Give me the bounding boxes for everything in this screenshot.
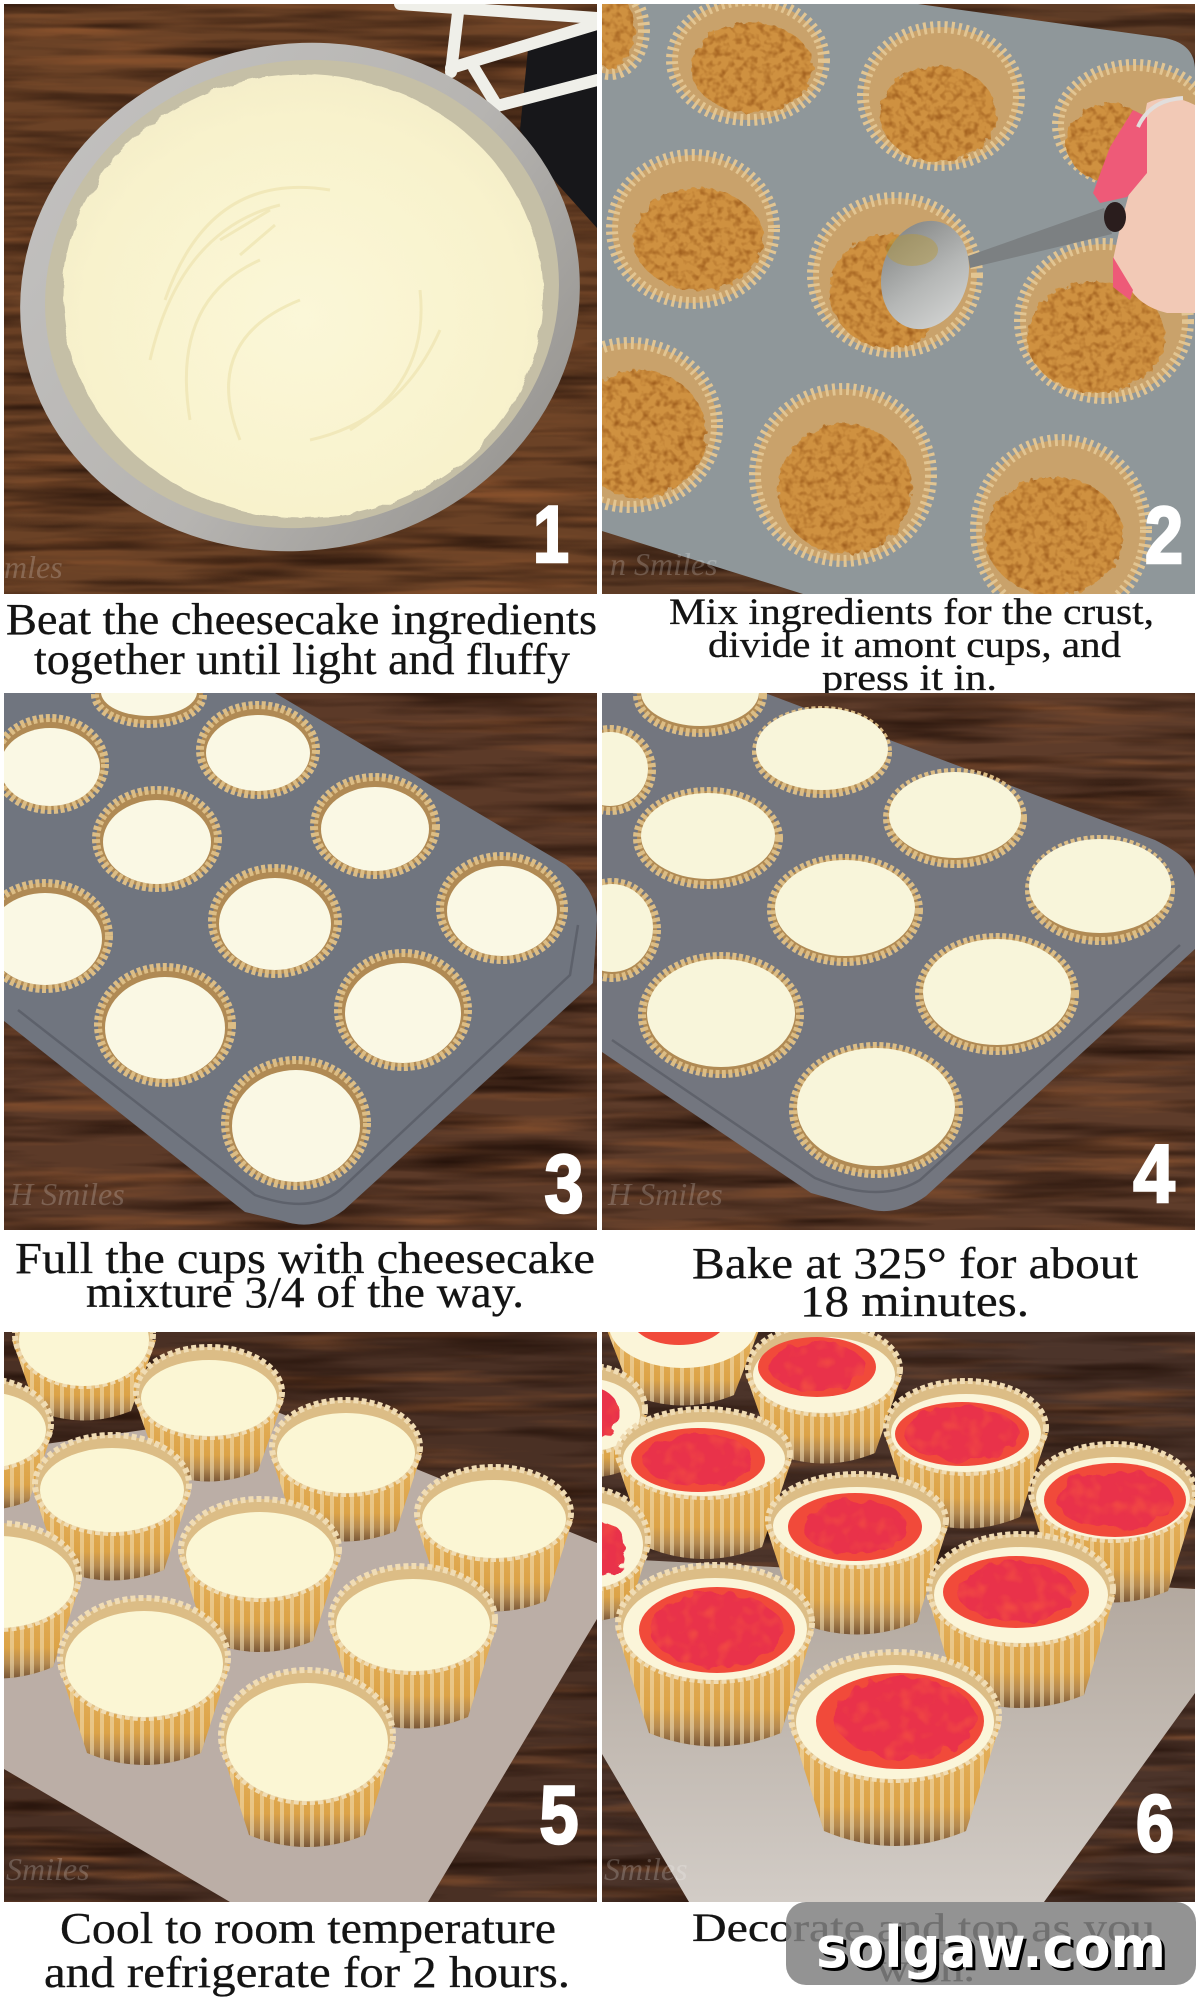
panel 6: strawberry topped cheesecakes [530,1282,1197,1902]
muffin pan [4,693,597,1225]
watermark: Smiles [6,1851,90,1887]
caption step 4 [692,1239,1138,1326]
mixer body [520,22,597,228]
wood background [602,1332,1195,1902]
mixing bowl [20,42,580,552]
caption step 6 [692,1905,1155,1990]
mixer beaters [400,4,597,106]
caption step 3 [15,1234,595,1317]
panel 5: cooled cheesecakes [0,1282,597,1902]
watermark: H Smiles [607,1176,723,1212]
baked cheesecakes [602,693,1175,1178]
caption step 1 [6,595,597,684]
muffin pan [602,4,1195,594]
wood background [4,693,597,1230]
paper cups with crumbs [602,4,1195,594]
wood background [602,4,1195,594]
step number 2: 2 [1145,490,1183,580]
watermark: mles [4,549,63,585]
serving board [4,1411,597,1902]
hand [1093,98,1195,313]
watermark: H Smiles [9,1176,125,1212]
step number 1: 1 [533,489,569,580]
caption step 2: Mix ingredients for the crust, [669,592,1154,633]
panel 2: crust in muffin pan [602,4,1195,594]
caption step 6: wish. [876,1945,975,1990]
topped cheesecakes [530,1282,1197,1846]
wood background [602,693,1195,1230]
caption step 5 [44,1904,570,1997]
caption step 4: 18 minutes. [800,1277,1029,1326]
serving board [602,1558,1195,1902]
watermark badge: solgaw.com [816,1915,1166,1981]
watermark: Smiles [604,1851,688,1887]
step number 3: 3 [544,1138,584,1230]
caption step 2: divide it amont cups, and [708,625,1122,666]
batter swirls [150,187,440,440]
step number 6: 6 [1136,1778,1174,1868]
caption step 3: Full the cups with cheesecake [15,1234,595,1283]
watermark: n Smiles [610,546,718,582]
caption step 5: and refrigerate for 2 hours. [44,1948,570,1997]
panel 4: baked cups [602,693,1195,1230]
panel 1: beating the batter [0,0,627,603]
caption step 6: Decorate and top as you [692,1905,1155,1950]
caption step 2 [669,592,1154,699]
caption step 3: mixture 3/4 of the way. [86,1268,524,1317]
cream batter [63,74,543,518]
muffin pan [602,693,1195,1211]
spoon [881,208,1112,330]
panel 3: filled cups [0,666,597,1230]
step number 4: 4 [1133,1127,1175,1220]
cheesecakes in liners [0,1282,573,1847]
wood background [4,1332,597,1902]
caption step 4: Bake at 325° for about [692,1239,1138,1288]
watermark badge: solgaw.com [819,1918,1169,1984]
step number 5: 5 [539,1769,579,1861]
caption step 1: together until light and fluffy [34,635,570,684]
caption step 5: Cool to room temperature [60,1904,556,1953]
cups with batter [0,666,564,1186]
wood background [4,4,597,594]
caption step 2: press it in. [822,658,997,699]
caption step 1: Beat the cheesecake ingredients [6,595,597,644]
